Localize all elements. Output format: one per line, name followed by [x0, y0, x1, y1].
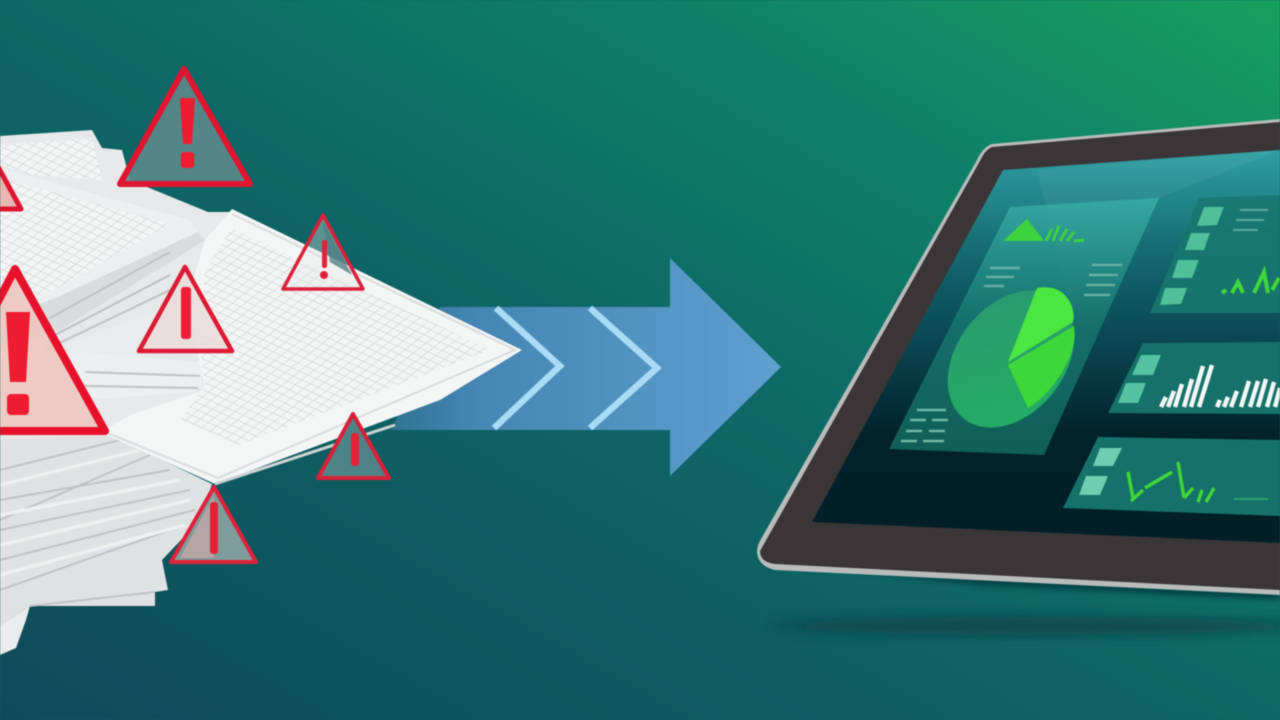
blue process arrow	[392, 258, 781, 476]
warning triangle: left edge	[0, 163, 21, 209]
tablet screen	[812, 150, 1280, 543]
screen light beam	[1037, 150, 1280, 358]
pie upper slice	[1008, 287, 1074, 362]
pie chart	[922, 266, 1100, 452]
pie chart panel	[889, 198, 1159, 455]
tablet silver rim	[757, 119, 1280, 595]
warning triangle: lower right	[318, 414, 389, 478]
panel icons	[1132, 355, 1161, 375]
warning triangle: centre on paper	[139, 267, 232, 351]
green scatter lines	[1128, 462, 1214, 502]
legend lines left	[984, 268, 1020, 286]
warning triangle: upper right on paper	[283, 215, 363, 289]
panel icons	[1093, 448, 1122, 466]
small area chart	[1003, 219, 1084, 241]
top data sheet	[100, 209, 522, 484]
white bars	[1161, 365, 1280, 407]
legend lines bottom	[901, 410, 948, 441]
warning triangle: top	[120, 69, 250, 184]
lower paper stack	[0, 430, 212, 655]
top right panel	[1150, 195, 1280, 313]
chevron one	[494, 308, 560, 428]
chevron two	[590, 308, 657, 428]
tablet ground shadow	[770, 617, 1280, 635]
warning triangle: large	[0, 269, 105, 431]
bar chart panel	[1108, 342, 1280, 414]
tablet bezel	[760, 122, 1280, 590]
panel icons	[1160, 207, 1224, 305]
tablet with dashboard	[757, 119, 1280, 600]
mini green chart	[1222, 272, 1279, 293]
panel caption line	[1234, 498, 1268, 500]
stack of paper documents	[0, 130, 522, 655]
panel text lines	[1233, 210, 1268, 230]
upper back sheets	[0, 130, 240, 440]
paper filler	[0, 130, 240, 440]
warning triangle: bottom	[171, 487, 256, 562]
pie lower slice	[1008, 326, 1075, 408]
legend lines right	[1084, 265, 1122, 295]
line chart panel	[1063, 437, 1280, 516]
tablet shadow edge	[850, 572, 1280, 600]
